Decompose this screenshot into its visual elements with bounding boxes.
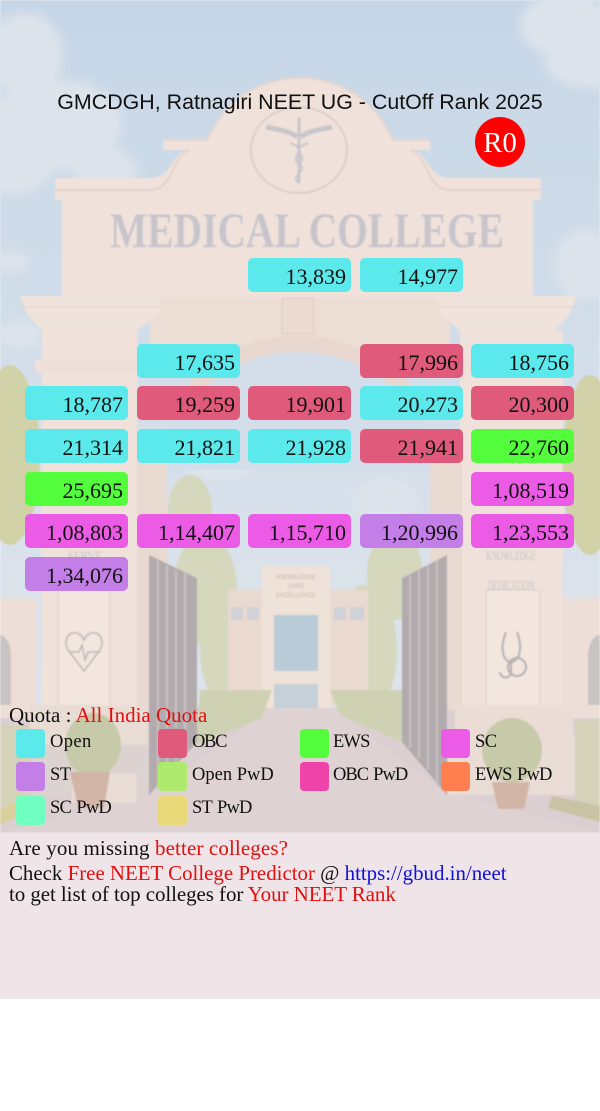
rank 1,08,519: 1,08,519 [492,478,569,503]
swatch OBC PwD [300,762,329,791]
label OBC: OBC [192,732,226,752]
rank 21,928 [248,429,351,463]
title: GMCDGH, Ratnagiri NEET UG - CutOff Rank 2025 [57,90,543,114]
rank 21,941: 21,941 [398,435,458,460]
pillar capitals [20,296,160,330]
label SC: SC [475,732,497,752]
rank 21,821 [137,429,240,463]
rank 1,14,407: 1,14,407 [158,520,235,545]
round badge R0: R0 [483,127,517,159]
background illustration: medical college gate [0,0,600,833]
rank 1,23,553 [471,514,574,548]
rank 21,314: 21,314 [62,435,123,460]
background illustration: medical college gate: KNOWLEDGE [276,575,316,581]
carved sign: MEDICAL COLLEGE [110,202,504,258]
swatch Open [16,729,45,758]
gates [149,555,197,795]
quota heading: Quota : All India Quota [9,703,207,727]
swatch SC [441,729,470,758]
rank 1,15,710: 1,15,710 [269,520,346,545]
rank 14,977 [360,258,463,292]
pillars [42,330,137,710]
promo line 2: Check Free NEET College Predictor @ https://gbud.in/neet [9,861,507,885]
background illustration: medical college gate: CARE [288,584,304,590]
rank 13,839: 13,839 [286,264,346,289]
rank 21,314 [25,429,128,463]
label EWS: EWS [333,732,370,752]
promo line 3: to get list of top colleges for Your NEET Rank [9,882,396,906]
background illustration: medical college gate: DEDICATION [488,579,534,594]
swatch EWS PwD [441,762,470,791]
side trees [0,365,600,555]
rank 1,08,803: 1,08,803 [46,520,123,545]
central trees [168,475,423,715]
building behind [228,590,368,705]
emblem: caduceus [251,107,347,193]
rank 21,821: 21,821 [174,435,235,460]
rank 14,977: 14,977 [398,264,458,289]
rank 20,273 [360,386,463,420]
ground and road [0,708,600,833]
label OBC PwD: OBC PwD [333,765,407,785]
rank 1,20,996: 1,20,996 [381,520,458,545]
background illustration: medical college gate: KNOWLEDGE [486,549,536,564]
pillar inscriptions and icons: SERVE [68,549,102,565]
rank 22,760 [471,429,574,463]
rank 18,787 [25,386,128,420]
rank 19,901 [248,386,351,420]
label SC PwD: SC PwD [50,798,111,818]
rank 1,34,076: 1,34,076 [46,563,123,588]
base blocks [30,705,148,745]
rank 25,695 [25,472,128,506]
rank 18,756 [471,344,574,378]
rank 1,08,519 [471,472,574,506]
label EWS PwD: EWS PwD [475,765,552,785]
swatch EWS [300,729,329,758]
rank 19,259: 19,259 [174,392,235,417]
label ST PwD: ST PwD [192,798,252,818]
rank 20,300: 20,300 [508,392,569,417]
swatch SC PwD [16,796,45,825]
rank 1,20,996 [360,514,463,548]
swatch ST PwD [158,796,187,825]
rank 18,787: 18,787 [62,392,123,417]
label ST: ST [50,765,71,785]
rank 21,928: 21,928 [286,435,346,460]
rank 1,14,407 [137,514,240,548]
rank 1,23,553: 1,23,553 [492,520,569,545]
label Open PwD: Open PwD [192,765,274,785]
rank 19,259 [137,386,240,420]
rank 1,34,076 [25,557,128,591]
entablature and arch [150,298,450,373]
rank 18,756: 18,756 [508,350,569,375]
rank 25,695: 25,695 [62,478,123,503]
rank grid [25,258,574,591]
swatch OBC [158,729,187,758]
potted plants [65,713,542,782]
rank 17,635 [137,344,240,378]
upper wall [55,78,541,300]
rank 1,15,710 [248,514,351,548]
rank 17,996 [360,344,463,378]
rank 17,996: 17,996 [398,350,458,375]
rank 13,839 [248,258,351,292]
rank 19,901: 19,901 [286,392,346,417]
panel: college predictor promotion [0,833,600,999]
rank 20,300 [471,386,574,420]
legend [16,729,552,825]
rank 20,273: 20,273 [398,392,458,417]
label Open: Open [50,732,92,752]
promo line 1: Are you missing better colleges? [9,836,288,860]
rank 22,760: 22,760 [508,435,569,460]
outer wall sections [0,598,36,718]
rank 1,08,803 [25,514,128,548]
swatch ST [16,762,45,791]
rank 21,941 [360,429,463,463]
rank 17,635: 17,635 [174,350,235,375]
round badge R0 [475,117,525,167]
kerbs [0,800,22,825]
swatch Open PwD [158,762,187,791]
background illustration: medical college gate: EXCELLENCE [276,593,316,599]
